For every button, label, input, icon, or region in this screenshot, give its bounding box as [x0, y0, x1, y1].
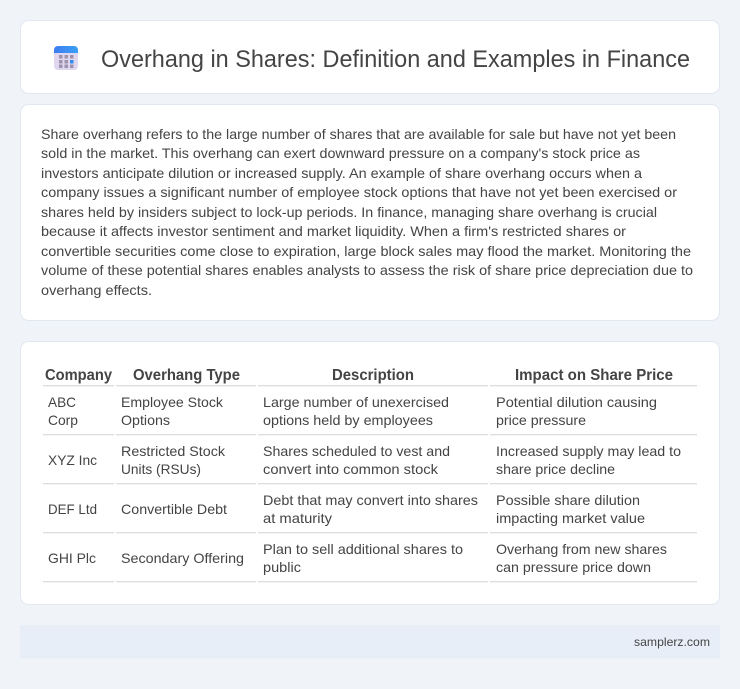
- table row: XYZ Inc: XYZ Inc: [48, 452, 97, 468]
- table row: DEF Ltd: at maturity: [263, 510, 332, 526]
- panel: overhang examples table: [20, 342, 720, 604]
- table row: ABC Corp: Large number of unexercised: [263, 394, 449, 410]
- table header row: [43, 367, 697, 386]
- table header row: Overhang Type: [133, 367, 240, 384]
- text block: definition: investors anticipate dilution or increased supply. An example of share overhang occurs when a: [41, 165, 642, 181]
- table row: DEF Ltd: impacting market value: [496, 510, 645, 526]
- table row: GHI Plc: public: [263, 559, 301, 575]
- table row: XYZ Inc: Increased supply may lead to: [496, 443, 681, 459]
- text block: definition: convertible securities come close to expiration, large block sales may flood the market. Monitoring the: [41, 243, 691, 259]
- table row: XYZ Inc: Restricted Stock: [121, 443, 226, 459]
- table row: DEF Ltd: Debt that may convert into shares: [263, 492, 478, 508]
- table row: ABC Corp: [43, 394, 697, 435]
- panel: definition paragraph: [20, 104, 720, 320]
- table header row: Impact on Share Price: [515, 367, 673, 384]
- text block: definition: [41, 126, 693, 298]
- footer bar: [20, 625, 720, 658]
- table row: XYZ Inc: convert into common stock: [263, 461, 439, 477]
- table row: GHI Plc: Overhang from new shares: [496, 541, 667, 557]
- table row: ABC Corp: price pressure: [496, 412, 586, 428]
- table row: XYZ Inc: [43, 443, 697, 484]
- text block: definition: company issues a significant number of employee stock options that have not yet been exercised or: [41, 184, 677, 200]
- table row: ABC Corp: Potential dilution causing: [496, 394, 657, 410]
- table row: ABC Corp: options held by employees: [263, 412, 433, 428]
- table row: DEF Ltd: Possible share dilution: [496, 492, 640, 508]
- table row: GHI Plc: [43, 541, 697, 582]
- panel: title header: [20, 20, 720, 94]
- title: Overhang in Shares: Definition and Examples in Finance: [101, 46, 690, 73]
- text block: definition: sold in the market. This overhang can exert downward pressure on a company's stock price as: [41, 145, 640, 161]
- icon: calendar: [54, 46, 78, 70]
- table row: GHI Plc: can pressure price down: [496, 559, 651, 575]
- table row: DEF Ltd: Convertible Debt: [121, 501, 227, 517]
- table row: ABC Corp: ABC: [48, 394, 76, 410]
- table row: XYZ Inc: share price decline: [496, 461, 615, 477]
- table row: GHI Plc: Plan to sell additional shares to: [263, 541, 463, 557]
- text block: definition: Share overhang refers to the large number of shares that are available for sale but have not yet been: [41, 126, 676, 142]
- text block: definition: shares held by insiders subject to lock-up periods. In finance, managing share overhang is crucial: [41, 204, 657, 220]
- table row: GHI Plc: Secondary Offering: [121, 550, 244, 566]
- footer source text: samplerz.com: [634, 635, 710, 649]
- text block: definition: overhang effects.: [41, 282, 152, 298]
- text block: definition: because it affects investor sentiment and market liquidity. When a firm's restricted shares or: [41, 223, 626, 239]
- table row: ABC Corp: Employee Stock: [121, 394, 224, 410]
- table row: XYZ Inc: Units (RSUs): [121, 461, 201, 477]
- table header row: Description: [332, 367, 414, 384]
- table header row: Company: [45, 367, 112, 384]
- table row: GHI Plc: GHI Plc: [48, 550, 96, 566]
- table row: XYZ Inc: Shares scheduled to vest and: [263, 443, 450, 459]
- table row: ABC Corp: Corp: [48, 412, 78, 428]
- table row: ABC Corp: Options: [121, 412, 170, 428]
- text block: definition: volume of these potential shares enables analysts to assess the risk of share price depreciation due to: [41, 262, 693, 278]
- table row: DEF Ltd: DEF Ltd: [48, 501, 97, 517]
- table row: DEF Ltd: [43, 492, 697, 533]
